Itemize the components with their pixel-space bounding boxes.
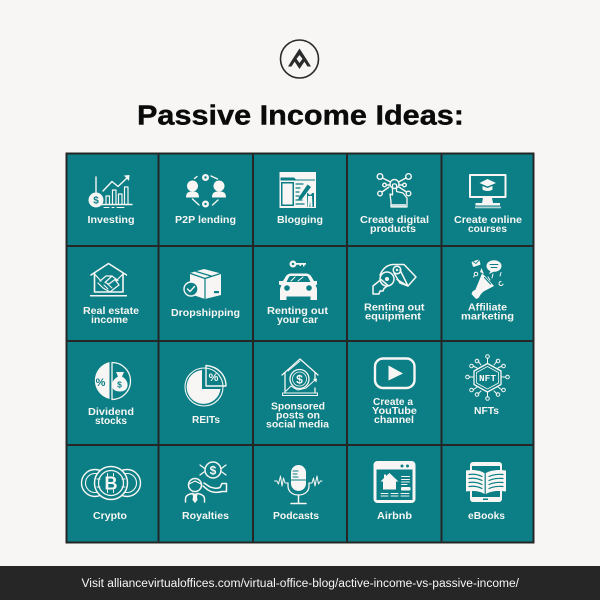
label: Royalties <box>182 511 229 522</box>
label <box>360 215 429 235</box>
icon: browser window with house <box>374 461 416 503</box>
card: Blogging <box>277 172 323 226</box>
card: P2P lending <box>175 174 236 226</box>
icon: key and tag <box>373 264 416 294</box>
label <box>372 397 417 426</box>
label: products <box>370 224 416 235</box>
label: eBooks <box>468 511 505 522</box>
label: Airbnb <box>377 511 412 522</box>
label: NFTs <box>474 406 499 417</box>
card: Real estate income <box>83 264 139 326</box>
card: REITs <box>185 366 226 426</box>
icon: half circle with money bag: $ <box>117 380 122 390</box>
label: marketing <box>461 312 514 322</box>
card: eBooks <box>466 462 506 522</box>
footer bar <box>0 566 600 600</box>
icon: pie chart with percent slice: % <box>209 372 219 384</box>
card: Affiliate marketing <box>461 259 514 322</box>
card: Renting out your car <box>267 260 329 326</box>
grid panel <box>66 153 534 543</box>
icon: three crypto coins: B <box>104 474 118 494</box>
label: income <box>91 315 128 326</box>
card: Create digital products <box>360 174 429 235</box>
icon: NFT circuit hexagon: NFT <box>479 374 497 384</box>
label: Sponsored <box>271 402 325 412</box>
label: Crypto <box>93 511 127 522</box>
label <box>461 302 514 322</box>
icon: half circle with money bag: % <box>96 377 106 389</box>
label <box>267 306 329 326</box>
title: Passive Income Ideas: <box>137 99 464 130</box>
icon: microphone with sound waves <box>274 465 322 504</box>
label: your car <box>277 315 318 326</box>
icon: blog page with writer <box>280 172 316 208</box>
label: P2P lending <box>175 215 236 226</box>
icon: house with dollar coin: $ <box>296 372 303 386</box>
label: Dividend <box>88 407 134 418</box>
card: Sponsored posts on social media <box>266 359 329 430</box>
label: equipment <box>365 312 422 322</box>
icon: monitor with graduation cap <box>470 175 506 208</box>
label: Dropshipping <box>171 308 240 319</box>
label: Real estate <box>83 306 139 317</box>
icon: person with coin on hand: $ <box>210 464 217 478</box>
card: Dropshipping <box>171 269 240 319</box>
label: posts on <box>276 410 320 422</box>
label <box>83 306 139 326</box>
icon: half circle with money bag <box>95 362 130 400</box>
label: Investing <box>88 215 134 226</box>
label: Create online <box>454 215 522 226</box>
card: NFTs <box>466 355 509 417</box>
label <box>364 302 425 322</box>
card: Create a YouTube channel <box>372 358 417 426</box>
card: Airbnb <box>374 461 416 522</box>
label: Affiliate <box>468 302 507 314</box>
card: Crypto <box>82 466 140 522</box>
label: Create digital <box>360 215 429 226</box>
label <box>88 407 134 427</box>
label: Renting out <box>364 302 425 314</box>
icon: hand touching network <box>377 174 411 208</box>
label: Podcasts <box>273 511 319 522</box>
card: Investing <box>88 175 134 226</box>
label: stocks <box>95 416 127 427</box>
card: Renting out equipment <box>364 264 425 322</box>
card: Royalties <box>182 462 229 522</box>
label: REITs <box>192 415 220 426</box>
label: channel <box>374 415 414 426</box>
icon: video play button <box>375 358 414 388</box>
card: Podcasts <box>273 465 322 522</box>
label <box>454 215 522 235</box>
icon: investing chart: $ <box>93 196 99 206</box>
label: courses <box>468 224 507 235</box>
card: Dividend stocks <box>88 362 134 427</box>
icon: megaphone and bubbles <box>471 259 503 299</box>
footer link text: Visit alliancevirtualoffices.com/virtual-office-blog/active-income-vs-passive-income/ <box>82 578 520 590</box>
icon: tablet with open book <box>466 462 506 502</box>
label: Blogging <box>277 215 323 226</box>
logo <box>280 40 318 78</box>
label: Create a <box>373 397 413 408</box>
label: YouTube <box>372 406 417 417</box>
icon: car with key <box>279 260 317 300</box>
icon: two people exchanging coins <box>186 174 226 208</box>
label: social media <box>266 420 329 430</box>
icon: parcel with check <box>184 269 221 299</box>
label: Renting out <box>267 306 329 317</box>
icon: house with handshake <box>90 264 127 296</box>
card: Create online courses <box>454 175 522 235</box>
label <box>266 402 329 430</box>
